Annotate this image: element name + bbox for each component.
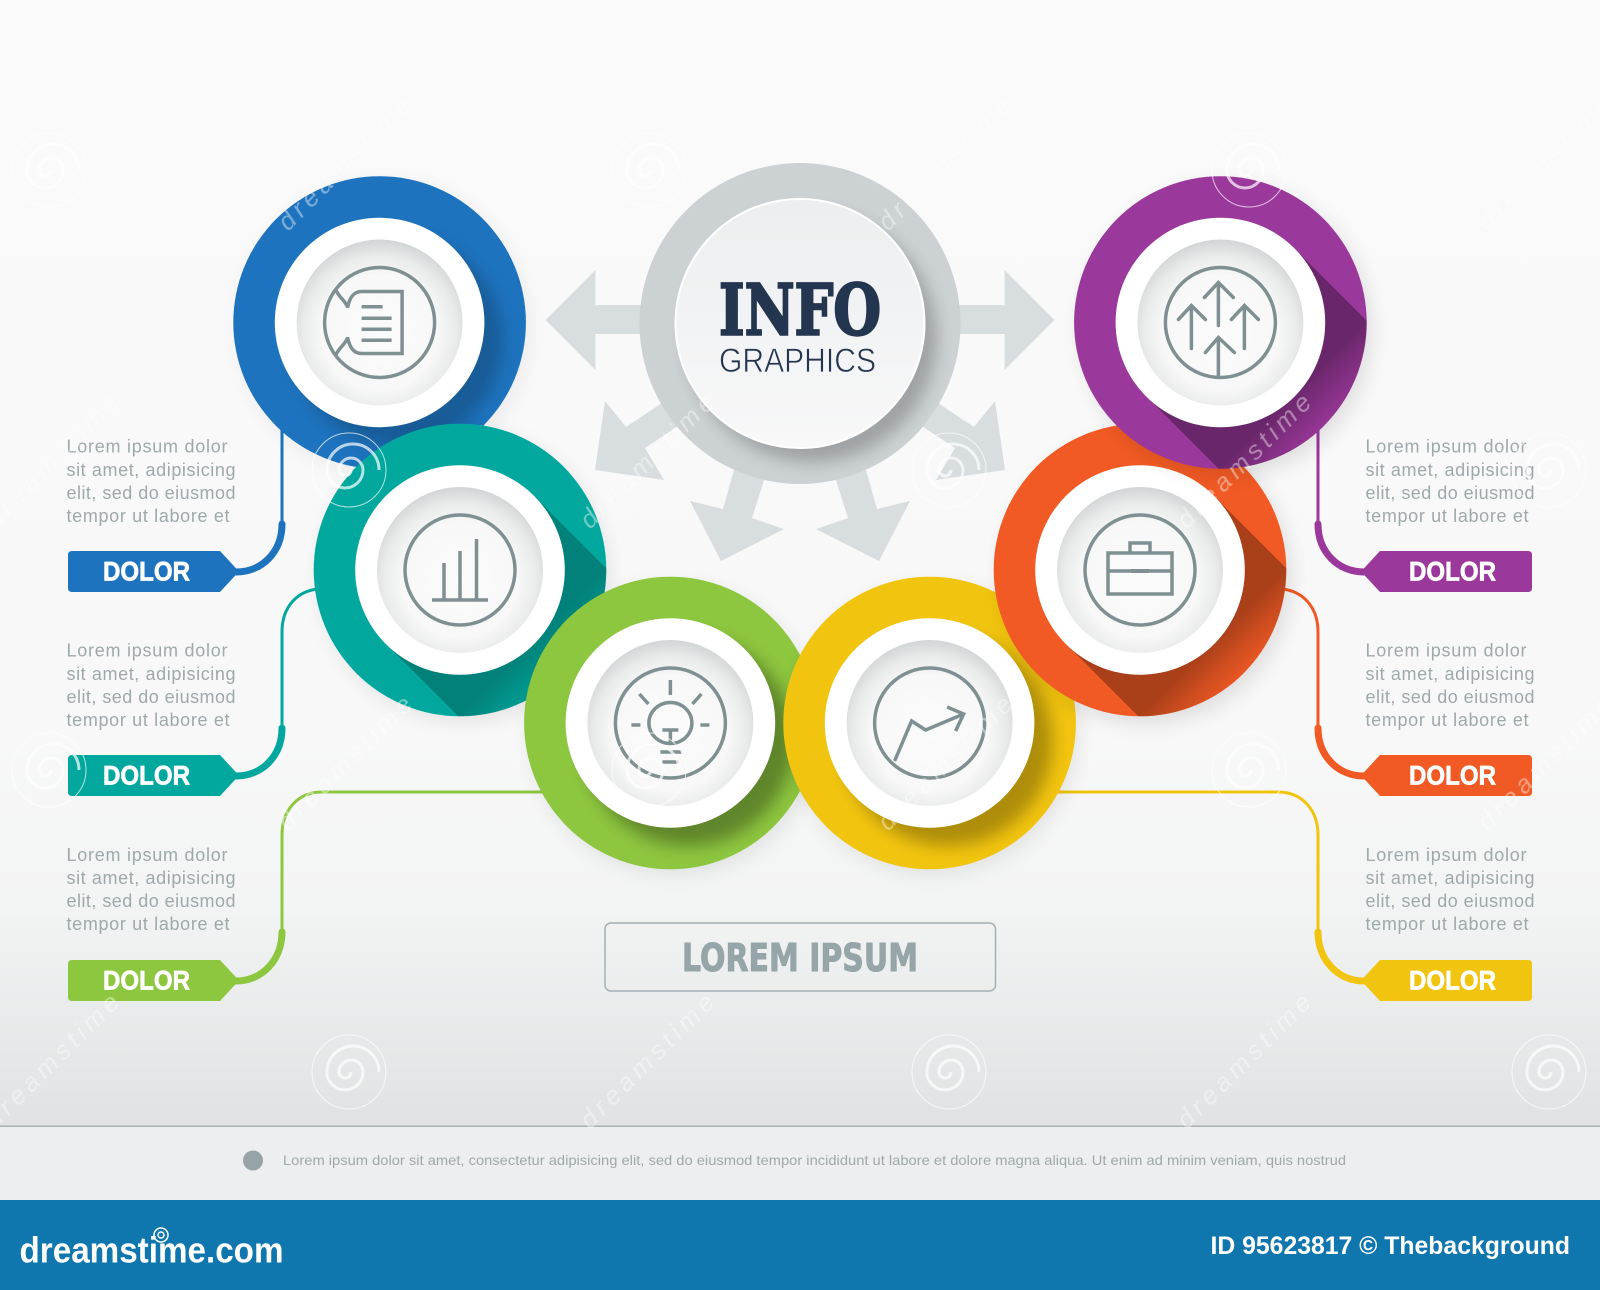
node: blue document xyxy=(233,176,530,474)
connector: purple xyxy=(1318,430,1364,572)
footnote xyxy=(243,1150,1346,1170)
arrow: bottom right xyxy=(816,420,910,561)
text block: left 3 xyxy=(66,845,236,934)
text block: right 1: elit, sed do eiusmod xyxy=(1366,483,1534,503)
text block: left 2: Lorem ipsum dolor xyxy=(66,641,228,661)
inner dish xyxy=(847,640,1013,806)
icon: bar chart xyxy=(405,515,515,625)
tag: orange xyxy=(1361,755,1532,796)
tag: yellow: DOLOR xyxy=(1409,966,1496,996)
tag: teal xyxy=(68,755,239,796)
outer shadow xyxy=(528,583,820,875)
text block: left 2: tempor ut labore et xyxy=(66,710,230,730)
white ring xyxy=(566,618,775,828)
text block: left 1: tempor ut labore et xyxy=(66,506,230,526)
footnote text: Lorem ipsum dolor sit amet, consectetur adipisicing elit, sed do eiusmod tempor incididunt ut labore et dolore magna aliqua. Ut enim ad minim veniam, quis nostrud xyxy=(283,1152,1346,1168)
text block: right 2: tempor ut labore et xyxy=(1366,710,1528,730)
logo spiral xyxy=(154,1228,168,1242)
icon: upward arrows xyxy=(1165,268,1275,378)
node: teal bar chart xyxy=(314,424,612,724)
outer shadow xyxy=(1000,432,1292,724)
credit bar xyxy=(0,1200,1600,1290)
white ring xyxy=(1035,465,1245,675)
connector: orange xyxy=(1282,589,1364,776)
title word: GRAPHICS: GRAPHICS xyxy=(719,342,876,380)
text block: left 2: elit, sed do eiusmod xyxy=(66,687,236,707)
logo text: dreamstime.com xyxy=(20,1230,284,1270)
text block: left 1: sit amet, adipisicing xyxy=(66,460,236,480)
text block: right 2: Lorem ipsum dolor xyxy=(1366,641,1526,661)
coloured ring xyxy=(994,424,1286,716)
white ring xyxy=(1116,218,1325,427)
arrows radiating from the centre circle xyxy=(546,270,1054,561)
text block: left 3: sit amet, adipisicing xyxy=(66,868,236,888)
watermark text: dreamstime xyxy=(573,387,720,534)
watermark text: dreamstime xyxy=(1170,987,1317,1134)
inner dish xyxy=(587,640,753,806)
text block: left 2: sit amet, adipisicing xyxy=(66,664,236,684)
tag: blue xyxy=(68,551,239,592)
outer shadow xyxy=(1080,184,1372,476)
watermark text: dreamstime xyxy=(871,689,1018,836)
tag: teal: DOLOR xyxy=(103,761,190,791)
inner dish xyxy=(1057,487,1223,653)
centre circle: info graphics xyxy=(640,163,960,484)
icon: document xyxy=(325,268,435,378)
white ring xyxy=(275,218,484,427)
connector: green xyxy=(236,792,545,981)
arrow: lower left xyxy=(595,362,743,480)
outer shadow xyxy=(788,583,1080,875)
text block: left 1: elit, sed do eiusmod xyxy=(66,483,236,503)
label box: lorem ipsum xyxy=(605,923,996,991)
coloured ring xyxy=(1074,176,1367,469)
label box: lorem ipsum: LOREM IPSUM xyxy=(682,936,918,980)
title word: INFO: INFO xyxy=(719,268,881,352)
tag: purple: DOLOR xyxy=(1409,557,1496,587)
long shadow xyxy=(390,498,606,716)
text block: right 2 xyxy=(1366,641,1534,730)
text block: left 3: Lorem ipsum dolor xyxy=(66,845,228,865)
soft shadow xyxy=(843,636,1052,846)
icon: briefcase xyxy=(1085,515,1195,625)
connector: teal xyxy=(236,589,318,776)
outer shadow xyxy=(238,182,530,474)
footnote background xyxy=(0,1126,1600,1200)
coloured ring xyxy=(524,577,817,869)
text block: left 3: tempor ut labore et xyxy=(66,914,230,934)
footnote bullet xyxy=(243,1150,263,1170)
text block: right 3 xyxy=(1366,845,1534,934)
text block: right 3: Lorem ipsum dolor xyxy=(1366,845,1526,865)
text block: right 3: sit amet, adipisicing xyxy=(1366,868,1534,888)
text block: left 1 xyxy=(66,436,236,526)
text block: right 3: tempor ut labore et xyxy=(1366,914,1528,934)
text block: left 1: Lorem ipsum dolor xyxy=(66,436,228,456)
arrow: bottom left xyxy=(690,420,784,561)
icon: light bulb xyxy=(615,668,725,778)
tag: yellow xyxy=(1361,960,1532,1001)
text block: right 1: Lorem ipsum dolor xyxy=(1366,436,1526,456)
watermark text: dreamstime xyxy=(1170,387,1317,534)
centre disc xyxy=(676,199,924,448)
watermark text: dreamstime xyxy=(871,89,1018,236)
arrow: lower right xyxy=(857,362,1005,480)
watermark text: dreamstime xyxy=(271,89,418,236)
node: orange briefcase xyxy=(994,426,1296,728)
icon: growth chart xyxy=(875,668,985,778)
soft shadow xyxy=(584,636,793,846)
connector: yellow xyxy=(1055,792,1364,981)
white ring xyxy=(355,465,565,675)
centre ring shadow xyxy=(687,212,937,462)
coloured ring xyxy=(233,176,526,469)
centre ring xyxy=(640,163,960,484)
tag: orange: DOLOR xyxy=(1409,761,1496,791)
inner dish xyxy=(1137,240,1303,406)
node: yellow growth chart xyxy=(783,577,1080,875)
outer shadow xyxy=(318,430,610,722)
tag: purple xyxy=(1361,551,1532,592)
text block: left 2 xyxy=(66,641,236,730)
text block: right 2: sit amet, adipisicing xyxy=(1366,664,1534,684)
connector: blue xyxy=(236,430,282,572)
white ring xyxy=(825,618,1034,828)
node: purple arrows xyxy=(1074,176,1376,480)
long shadow xyxy=(1068,498,1286,716)
text block: right 1: tempor ut labore et xyxy=(1366,506,1528,526)
coloured ring xyxy=(314,424,606,716)
text block: right 3: elit, sed do eiusmod xyxy=(1366,891,1534,911)
coloured ring xyxy=(783,577,1076,869)
tag: green: DOLOR xyxy=(103,966,190,996)
watermark spirals xyxy=(12,133,1586,1109)
image id and author: ID 95623817 © Thebackground xyxy=(1210,1232,1570,1260)
node: green light bulb xyxy=(524,577,820,875)
watermark text: dreamstime xyxy=(573,987,720,1134)
text block: left 3: elit, sed do eiusmod xyxy=(66,891,236,911)
watermark text: dreamstime xyxy=(271,689,418,836)
inner dish xyxy=(377,487,543,653)
text block: right 1 xyxy=(1366,436,1534,526)
text block: right 1: sit amet, adipisicing xyxy=(1366,460,1534,480)
long shadow xyxy=(1150,252,1367,469)
tag: green xyxy=(68,960,239,1001)
arrow: left xyxy=(546,270,700,370)
arrow: right xyxy=(900,270,1054,370)
tag: blue: DOLOR xyxy=(103,557,190,587)
text block: right 2: elit, sed do eiusmod xyxy=(1366,687,1534,707)
inner dish xyxy=(297,240,463,406)
credit bar background xyxy=(0,1200,1600,1290)
soft shadow xyxy=(293,236,502,445)
